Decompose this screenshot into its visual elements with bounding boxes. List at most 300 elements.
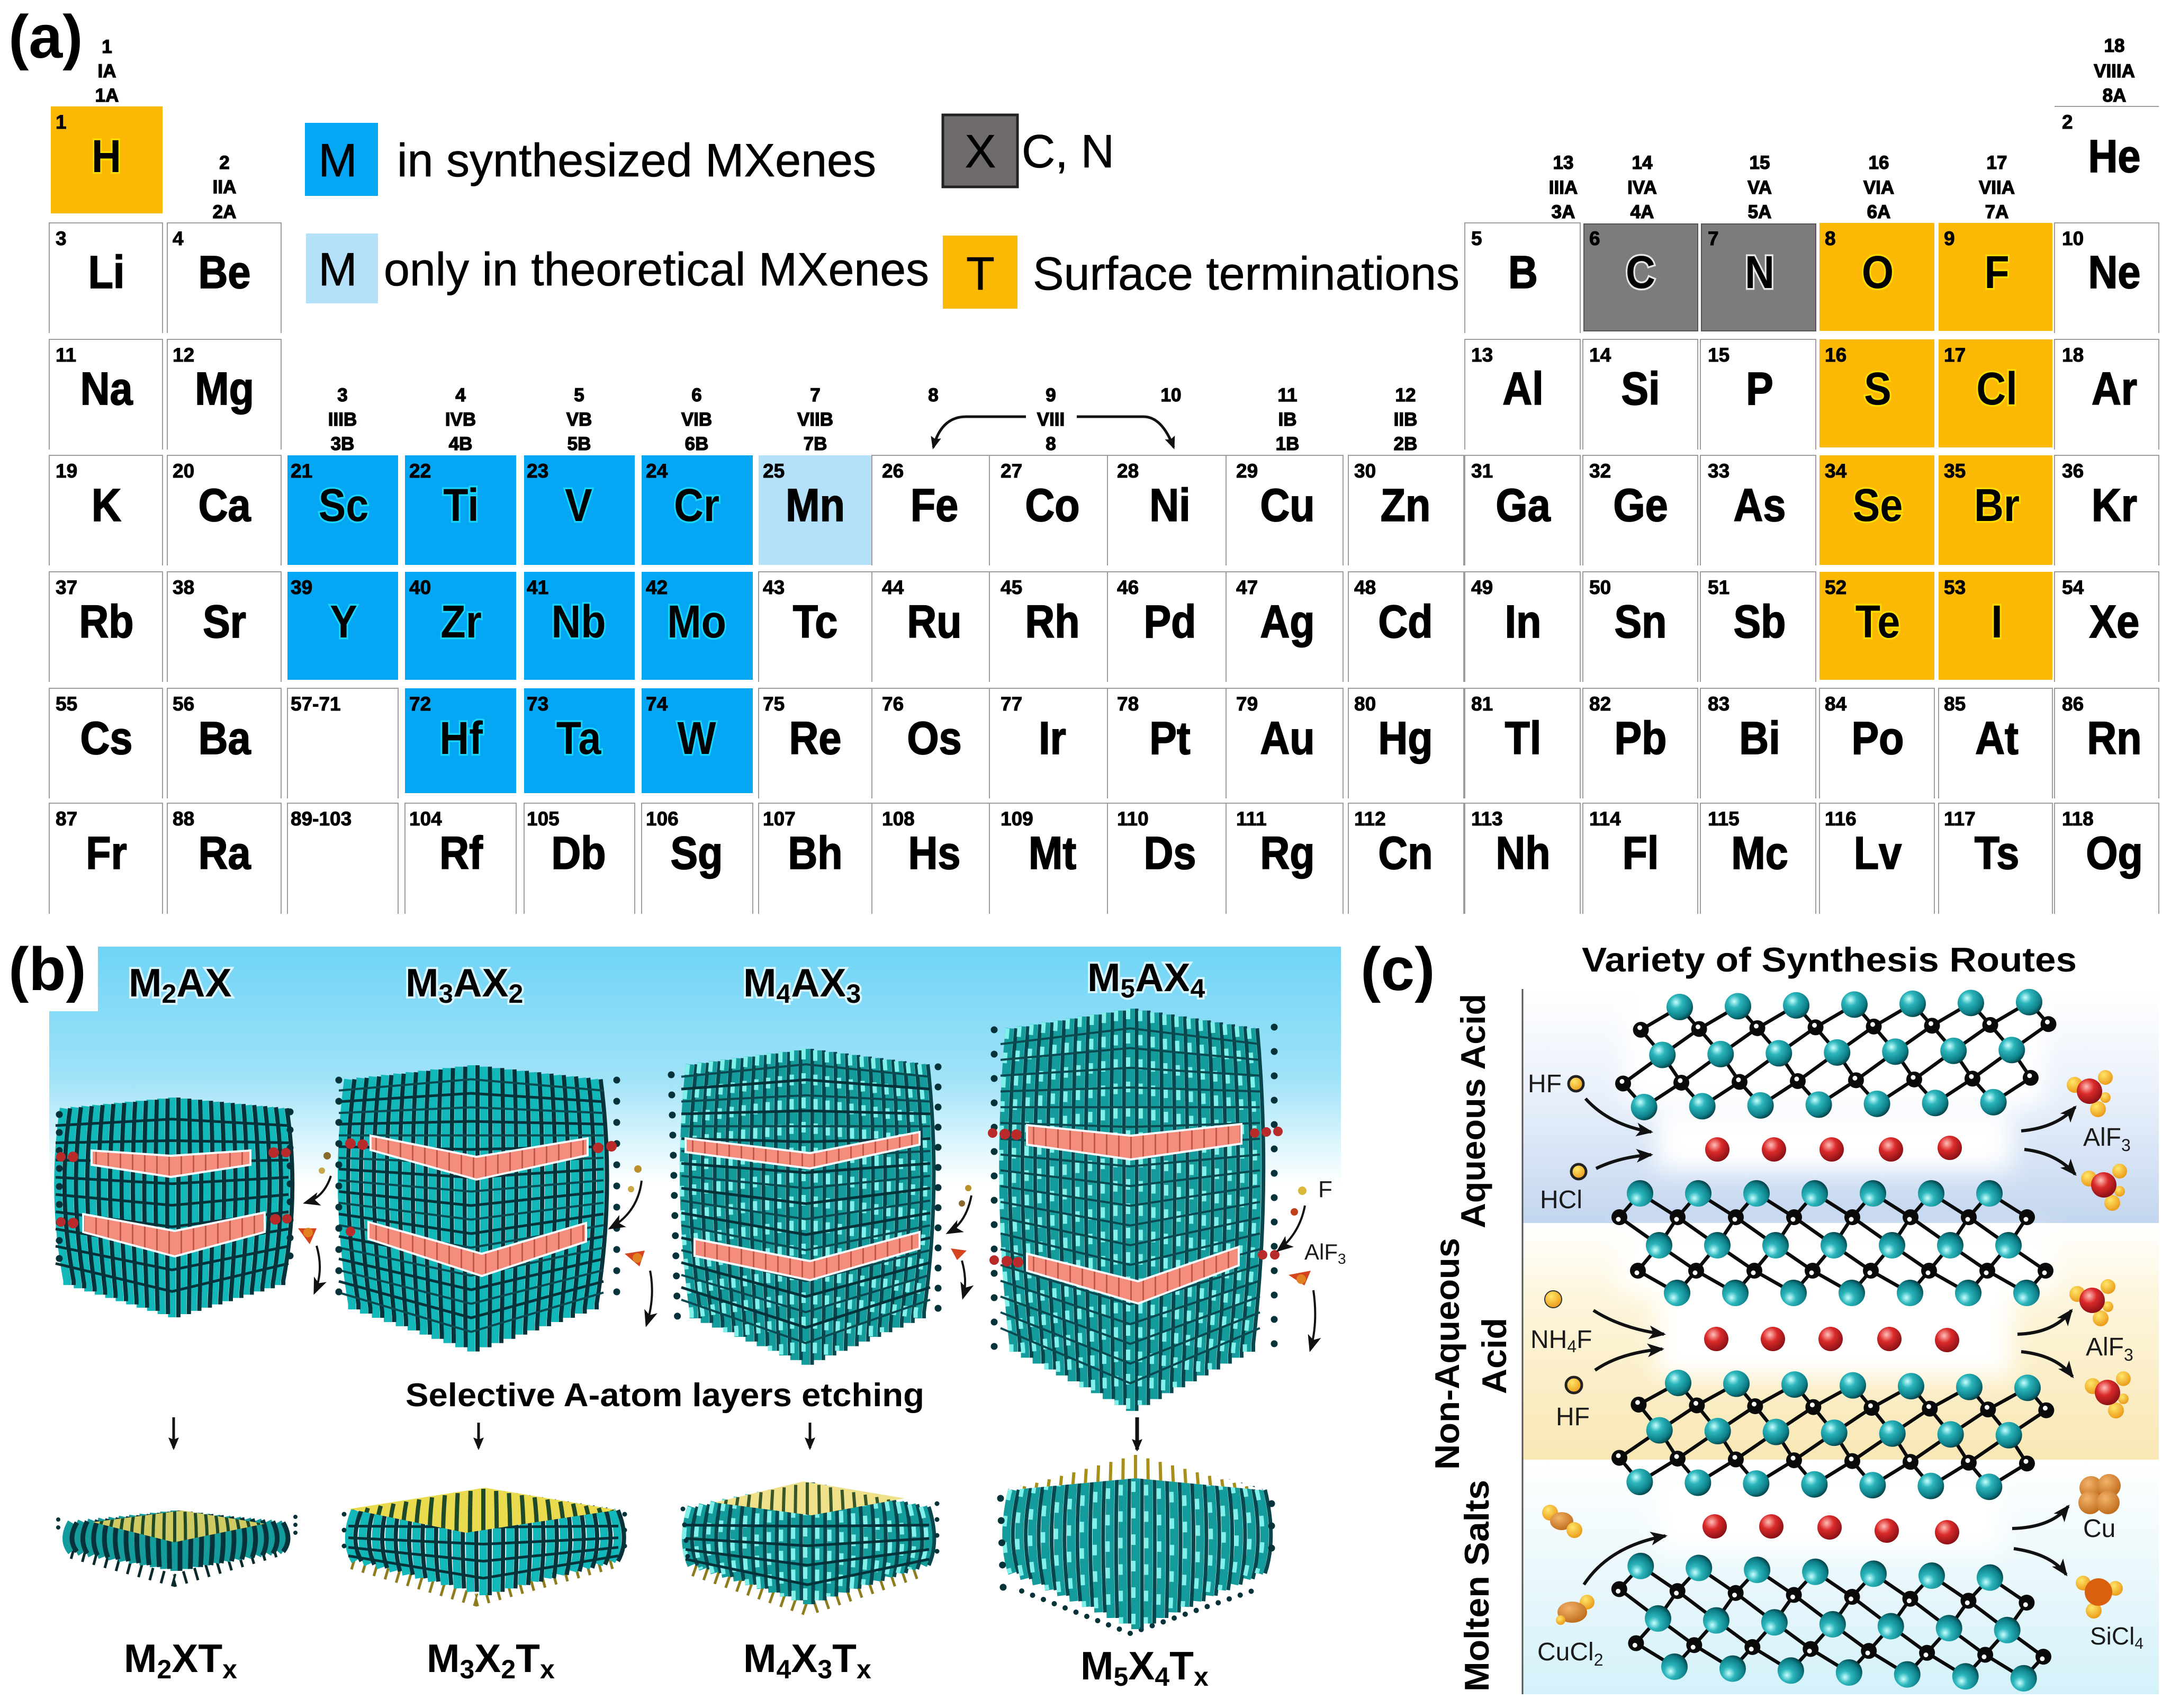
lanthanide placeholder 57-71: 57-71 [291,693,341,715]
legend: T surface terminations: T [966,247,995,300]
element Ru [872,572,989,682]
label M2XTx: 2 [157,1655,172,1684]
arrow NH4F in [1593,1310,1664,1334]
element Tc [759,572,872,682]
element Xe: 54 [2062,577,2084,598]
element W [642,688,753,793]
vertical label: Non-Aqueous: Non-Aqueous [1428,1238,1466,1470]
label M5X4Tx: 5 [1113,1662,1128,1692]
element He [2055,106,2159,182]
panel label (a): (a) [8,3,83,71]
group header 15 VA 5A: 15 [1750,152,1770,173]
MXene sheet M3X2Tx [344,1485,625,1600]
axis line [1521,989,1524,1694]
group header 15 VA 5A [1747,152,1772,222]
element Mg: Mg [195,363,254,415]
element Sn [1583,572,1698,682]
element Ts: Ts [1975,828,2019,879]
element Re [759,688,872,798]
element Fe: 26 [882,460,904,482]
element Tl: Tl [1505,713,1541,764]
element Li [49,223,163,333]
arrow out to AlF3 lower [2024,1149,2075,1174]
arrow HF in, aqueous [1586,1099,1651,1132]
element Cs [49,688,163,798]
element Cu [1226,455,1343,565]
element In: 49 [1471,577,1493,598]
group header 4 IVB 4B: IVB [445,409,476,430]
element Ne: Ne [2088,247,2140,298]
legend: synthesized M: in synthesized MXenes [397,134,876,186]
legend: X C, N: X [965,125,996,177]
etching reaction arrows, molecules and labels F, AlF3, block 4: 3 [1338,1251,1346,1267]
label M3X2Tx: X [474,1636,501,1680]
element W: 74 [646,693,668,715]
molecule and label NH4F: NH [1530,1326,1567,1354]
group header 7 VIIB 7B [797,385,833,454]
panel b: MAX phase etching into MXenes [8,936,1346,1692]
element Au: Au [1260,713,1315,764]
element Pb: Pb [1615,713,1666,764]
group header 14 IVA 4A: 14 [1632,152,1653,173]
element Pd [1107,572,1226,682]
label M3X2Tx: 3 [460,1655,474,1684]
element Te [1819,572,1934,680]
element Sc: 21 [291,460,312,482]
element Se [1819,455,1934,565]
element Re: 75 [763,693,785,715]
group header 12 IIB 2B: IIB [1394,409,1417,430]
element He: 2 [2062,111,2073,133]
element At: At [1975,713,2019,764]
element Pd: Pd [1144,596,1196,648]
group header 4 IVB 4B: 4B [449,434,472,454]
product AlF3 upper, aqueous: 3 [2121,1136,2131,1155]
group header 1 IA 1A: 1 [102,37,112,57]
group header 7 VIIB 7B: 7 [810,385,821,406]
element Ca: Ca [199,480,251,531]
element Bi: 83 [1708,693,1729,715]
molecule and label HCl [1540,1164,1586,1214]
group header 2 IIA 2A: IIA [213,177,236,197]
group header 1 IA 1A: IA [97,61,116,82]
element Cu: 29 [1236,460,1258,482]
product AlF3 upper, non-aqueous [2069,1279,2133,1364]
element Sg [642,803,753,914]
label M3X2Tx: T [516,1636,540,1680]
element Ds: Ds [1144,828,1196,879]
product Cu cluster: Cu [2083,1515,2115,1543]
element Mc [1700,803,1816,914]
vertical label: Acid: Acid [1475,1318,1514,1394]
element Y [287,572,398,680]
element Bh [759,803,872,914]
title M5AX4: 4 [1190,974,1205,1003]
element Hf: 72 [409,693,431,715]
element Br [1939,455,2052,565]
element Xe [2055,572,2159,682]
group header 11 IB 1B: IB [1278,409,1297,430]
element Ni [1107,455,1226,565]
element Rb: 37 [56,577,77,598]
title M4AX3: 3 [846,979,861,1009]
label M3X2Tx: x [540,1655,555,1684]
etching reaction arrows, molecules and labels F, AlF3, block 4: AlF [1304,1239,1338,1264]
molecule and label HF aqueous: HF [1528,1070,1562,1098]
element N [1701,224,1816,331]
group header 5 VB 5B [566,385,592,454]
group header 8 9 10 VIII with bracket arrows: 8 [928,385,939,406]
element Hs: Hs [908,828,960,879]
legend: X C, N: C, N [1022,125,1114,177]
element Hf [405,688,516,793]
arrow down 1 [173,1417,175,1448]
element Ir: Ir [1039,713,1066,764]
element Na [49,339,163,450]
element Cd: Cd [1378,596,1433,648]
label M4X3Tx: M [743,1636,776,1680]
element Co: Co [1025,480,1080,531]
arrow down 4 [1135,1417,1139,1450]
vertical label: Aqueous Acid: Aqueous Acid [1454,994,1492,1228]
element Os: Os [907,713,962,764]
panel c: variety of synthesis routes [1361,936,2159,1694]
group header 6 VIB 6B: 6 [691,385,702,406]
element Ti: Ti [443,480,479,531]
element Rf: Rf [439,828,483,879]
element Be: Be [199,247,250,298]
element Sn: Sn [1615,596,1666,648]
element F [1939,223,2052,331]
arrow out to Cu [2012,1506,2068,1529]
element Sc [287,455,398,565]
element H: 1 [56,111,67,133]
element Ag: 47 [1236,577,1258,598]
element Si: Si [1621,363,1660,415]
element Mn [759,455,872,565]
arrow out to SiCl4 [2014,1549,2066,1575]
group header 7 VIIB 7B: 7B [804,434,827,454]
element Y: Y [330,596,357,648]
group header 11 IB 1B: 1B [1276,434,1299,454]
element Sb: 51 [1708,577,1729,598]
element Rf: 104 [409,808,442,830]
group header 7 VIIB 7B: VIIB [797,409,833,430]
title M2AX: AX [176,960,231,1005]
element Tl: 81 [1471,693,1493,715]
element Au: 79 [1236,693,1258,715]
product SiCl4: 4 [2134,1635,2143,1652]
element Ds: 110 [1117,808,1149,830]
title M2AX: 2 [161,979,176,1009]
element B: 5 [1471,228,1482,249]
group header 16 VIA 6A: VIA [1863,177,1894,198]
element Br: 35 [1944,460,1966,482]
element Se: 34 [1825,460,1847,482]
element Rh: Rh [1025,596,1080,648]
element Kr: 36 [2062,460,2084,482]
group header 4 IVB 4B [445,385,476,454]
element Nb: Nb [551,596,606,648]
title M4AX3: AX [791,960,846,1005]
group header 3 IIIB 3B: 3B [331,434,354,454]
element Cd: 48 [1354,577,1376,598]
label M5X4Tx: x [1194,1662,1209,1692]
element Rg: 111 [1236,808,1267,830]
element In [1465,572,1580,682]
element Ga: 31 [1471,460,1493,482]
element Nh: Nh [1496,828,1551,879]
group header 17 VIIA 7A: 17 [1987,152,2007,173]
element Br: Br [1974,480,2020,531]
group header 13 IIIA 3A: IIIA [1549,177,1578,198]
legend: synthesized M [305,123,876,196]
group header 15 VA 5A: 5A [1748,202,1771,222]
element I: 53 [1944,577,1966,598]
element Mc: 115 [1708,808,1740,830]
label M2XTx: M [124,1636,157,1680]
element Sg: Sg [671,828,723,879]
element Mo: Mo [667,596,726,648]
element Sc: Sc [319,480,368,531]
element Nb: 41 [527,577,548,598]
group header 12 IIB 2B: 2B [1394,434,1417,454]
element Nh: 113 [1471,808,1503,830]
group header 15 VA 5A: VA [1747,177,1772,198]
element Ga [1465,455,1580,565]
element Lv [1819,803,1934,914]
label M4X3Tx: x [857,1655,871,1684]
element Y: 39 [291,577,312,598]
group header 16 VIA 6A: 16 [1869,152,1889,173]
element Mt: 109 [1001,808,1033,830]
element Db: Db [551,828,606,879]
label M4X3Tx: T [832,1636,857,1680]
element Fr: 87 [56,808,77,830]
element Ra: 88 [173,808,194,830]
element Ni: Ni [1149,480,1191,531]
element Mc: Mc [1731,828,1788,879]
arrow out to AlF3 upper [2021,1107,2075,1131]
section background: aqueous acid [1523,989,2159,1223]
element C: 6 [1589,228,1600,249]
group header 16 VIA 6A: 6A [1867,202,1890,222]
element Ti [405,455,516,565]
element F: F [1984,247,2010,298]
element Mt [989,803,1107,914]
element Al [1465,339,1580,450]
element Sr [167,572,281,682]
element S: 16 [1825,344,1846,366]
panel label (b): (b) [8,936,86,1003]
group header 14 IVA 4A: IVA [1627,177,1657,198]
element Cr: Cr [674,480,719,531]
element Ne [2055,223,2159,333]
label M5X4Tx: T [1169,1643,1194,1688]
element Cd [1348,572,1464,682]
arrow down 2 [478,1423,480,1448]
element Rn: 86 [2062,693,2084,715]
arrow out to AlF3 upper, non-aqueous [2017,1310,2071,1334]
element Ca [167,455,281,565]
element Ge [1583,455,1698,565]
element Cr: 24 [646,460,668,482]
product SiCl4 [2076,1576,2143,1652]
element Na: Na [80,363,133,415]
etching reaction arrows, molecules and labels F, AlF3, block 4 [1278,1176,1346,1350]
element Rn: Rn [2087,713,2142,764]
block: M5AX4 crystal with pink A layers [988,1009,1283,1411]
element Mg [167,339,281,450]
element Fl: Fl [1623,828,1659,879]
actinide placeholder 89-103 [287,803,398,914]
element Hs: 108 [882,808,915,830]
element V: 23 [527,460,548,482]
element Fr [49,803,163,914]
molecule and label NH4F [1530,1291,1592,1356]
element S [1819,339,1934,447]
element Ge: 32 [1589,460,1611,482]
element Og: Og [2086,828,2143,879]
element Zr: Zr [440,596,482,648]
group header 13 IIIA 3A [1549,152,1578,222]
element Ir [989,688,1107,798]
molecule and label HF aqueous [1528,1070,1583,1098]
lattice sheet: molten salt [1608,1552,2055,1693]
group header 8 9 10 VIII with bracket arrows: 8 [1046,434,1056,454]
group header 17 VIIA 7A: VIIA [1979,177,2015,198]
element Hg: Hg [1378,713,1433,764]
element Ta [524,688,635,793]
title M5AX4: AX [1135,955,1190,1000]
title M3AX2: AX [453,960,508,1005]
element Pd: 46 [1117,577,1139,598]
element Cs: 55 [56,693,77,715]
element Pb [1583,688,1698,798]
element Os [872,688,989,798]
element Ds [1107,803,1226,914]
element Po: Po [1852,713,1904,764]
label M5X4Tx: 4 [1155,1662,1169,1692]
element Fl [1583,803,1698,914]
element Rh [989,572,1107,682]
element P: P [1746,363,1773,415]
element Se: Se [1853,480,1903,531]
molecule and label NH4F: F [1577,1326,1592,1354]
element Sr: Sr [203,596,246,648]
block: M4AX3 crystal with pink A layers [671,1049,938,1365]
element Sb [1700,572,1816,682]
element Au [1226,688,1343,798]
element H: H [92,131,121,182]
element Cl [1939,339,2052,447]
element Kr [2055,455,2159,565]
group header 3 IIIB 3B [328,385,357,454]
element Si: 14 [1589,344,1611,366]
element Ir: 77 [1001,693,1022,715]
panel label (c): (c) [1361,936,1435,1003]
molecule: CuCl2 upper [1542,1505,1582,1538]
element Nb [524,572,635,680]
element Rb [49,572,163,682]
element Li: 3 [56,228,67,249]
element Al: Al [1502,363,1544,415]
label M2XTx: XT [172,1636,222,1680]
group header 14 IVA 4A: 4A [1630,202,1654,222]
element Ts: 117 [1944,808,1976,830]
element Rg [1226,803,1343,914]
element Nh [1465,803,1580,914]
lattice sheet: non-aqueous lower [1611,1369,2055,1501]
element Ag: Ag [1260,596,1315,648]
element Cl: Cl [1976,363,2017,415]
label M4X3Tx: X [791,1636,817,1680]
element Tc: Tc [793,596,837,648]
title M4AX3: 4 [776,979,791,1009]
group header 18 VIIIA 8A: 8A [2103,85,2126,106]
element Bh: 107 [763,808,796,830]
MXene sheet M2XTx [58,1509,295,1580]
element Be [167,223,281,333]
element Bh: Bh [788,828,843,879]
legend: synthesized M: M [318,134,357,186]
group header 14 IVA 4A [1627,152,1657,222]
MXene sheet M5X4Tx [1001,1448,1272,1633]
label M5X4Tx: X [1128,1643,1155,1688]
element O: 8 [1825,228,1836,249]
element Lv: Lv [1854,828,1902,879]
element Pt: 78 [1117,693,1139,715]
arrow CuCl2 in [1584,1536,1665,1585]
group header 5 VB 5B: VB [566,409,592,430]
element Tl [1465,688,1580,798]
element As [1700,455,1816,565]
lattice sheet: aqueous upper [1614,988,2058,1121]
element O [1819,223,1934,331]
element S: S [1864,363,1891,415]
group header 12 IIB 2B: 12 [1395,385,1416,406]
product SiCl4: SiCl [2090,1622,2134,1650]
group header 8 9 10 VIII with bracket arrows [928,385,1181,454]
element Ar [2055,339,2159,450]
group header 1 IA 1A [95,37,119,106]
molecule and label HF non-aqueous: HF [1556,1403,1590,1431]
element Ge: Ge [1613,480,1668,531]
element Pb: 82 [1589,693,1611,715]
element Po [1819,688,1934,798]
element F: 9 [1944,228,1955,249]
lanthanide placeholder 57-71 [287,688,398,798]
molecule and label CuCl2: 2 [1594,1650,1603,1669]
group header 2 IIA 2A: 2 [219,152,230,173]
title M5AX4: 5 [1120,974,1135,1003]
element Mn: 25 [763,460,785,482]
element Be: 4 [173,228,184,249]
element C [1584,224,1698,331]
element In: In [1505,596,1541,648]
sky gradient background [49,947,1341,1186]
element Ne: 10 [2062,228,2084,249]
group header 4 IVB 4B: 4 [455,385,466,406]
element Mg: 12 [173,344,194,366]
element Te: Te [1855,596,1900,648]
element K: K [92,480,121,531]
block: M3AX2 crystal with pink A layers [339,1065,617,1352]
element Fe [872,455,989,565]
group header 18 VIIIA 8A: VIIIA [2094,61,2135,82]
element Ra [167,803,281,914]
element W: W [677,713,716,764]
